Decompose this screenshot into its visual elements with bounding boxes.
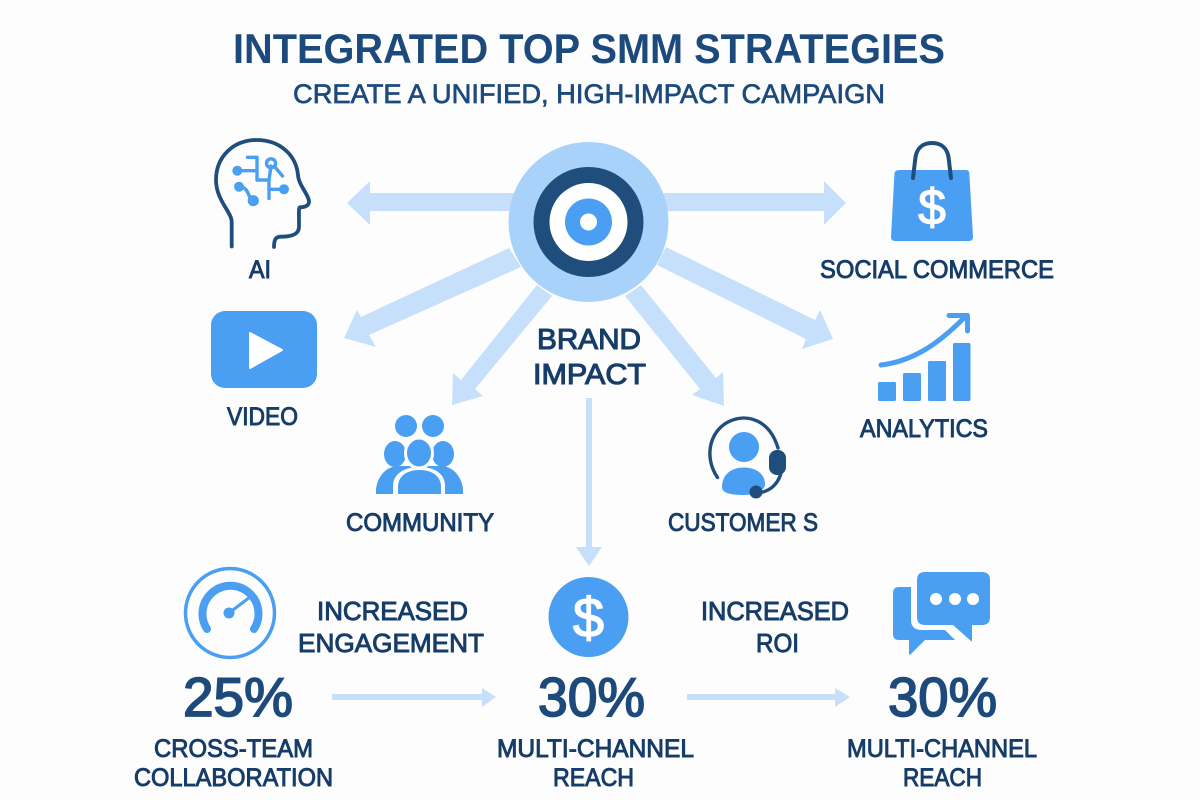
label: increased engagement: INCREASED [317,596,468,626]
arrow: to analytics [657,247,833,349]
heading: brand impact: BRAND [537,324,641,356]
metric: cross-team collaboration [134,568,333,792]
label: cross-team collaboration: CROSS-TEAM [154,735,313,763]
value: 25%: 25% [183,666,293,728]
label: multi-channel reach: MULTI-CHANNEL [847,735,1037,763]
icon: AI head [216,140,309,247]
subtitle: CREATE A UNIFIED, HIGH-IMPACT CAMPAIGN [293,79,885,109]
arrow: to community [452,285,552,405]
icon: gauge [186,568,274,658]
label: community: COMMUNITY [346,509,494,537]
label: cross-team collaboration: COLLABORATION [134,764,333,792]
icon: customer support headset [710,418,786,498]
icon: shopping bag: $ [918,179,946,235]
title: INTEGRATED TOP SMM STRATEGIES [233,25,945,72]
label: video: VIDEO [227,403,298,431]
arrow: reach to ROI [687,688,850,707]
icon: dollar coin [548,577,628,657]
heading: brand impact: IMPACT [533,359,646,391]
value: 30%: 30% [538,666,645,728]
label: social commerce: SOCIAL COMMERCE [820,256,1054,284]
arrow: engagement to reach [332,688,496,707]
label: AI: AI [249,256,271,284]
arrow: to AI [347,181,520,225]
arrow: to social commerce [660,181,846,225]
icon: community group [376,415,463,494]
label: multi-channel reach: MULTI-CHANNEL [497,735,694,763]
icon: shopping bag [891,143,973,241]
metric: multi-channel reach right [847,572,1037,792]
arrows from the central target [332,181,850,707]
arrow: down to metrics [576,398,602,566]
icon: video play [211,311,317,388]
label: customer s: CUSTOMER S [668,509,818,537]
arrow: to video [344,248,521,347]
arrow: to customer service [625,285,724,406]
icon: analytics chart [878,316,970,401]
label: increased ROI: ROI [756,628,799,658]
value: 30%: 30% [888,666,997,728]
label: increased ROI: INCREASED [701,596,849,626]
icon: brand impact target [508,142,668,302]
label: multi-channel reach: REACH [553,764,634,792]
metric: multi-channel reach centre [497,577,694,792]
label: analytics: ANALYTICS [860,415,988,443]
label: multi-channel reach: REACH [903,764,982,792]
label: increased engagement: ENGAGEMENT [298,628,484,658]
icon: dollar coin: $ [573,586,604,649]
icon: chat bubbles [893,572,990,655]
